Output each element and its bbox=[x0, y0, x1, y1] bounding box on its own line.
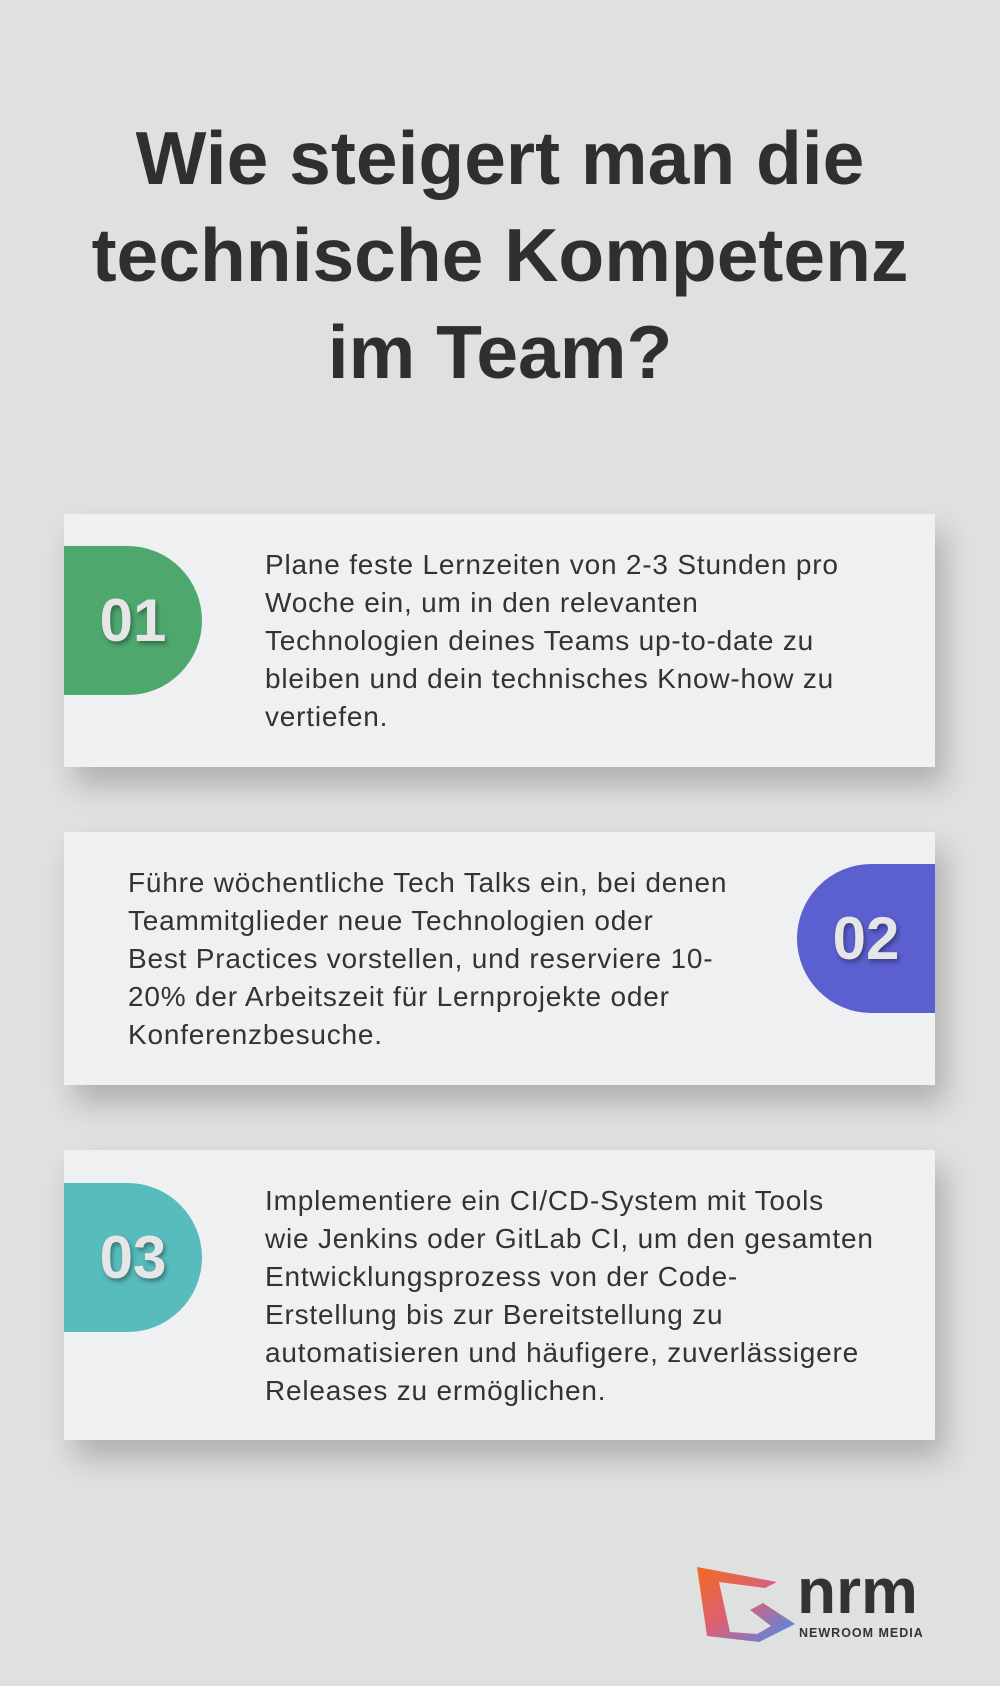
text 03 bbox=[265, 1185, 874, 1406]
text 03: automatisieren und häufigere, zuverlässigere bbox=[265, 1337, 859, 1368]
title: technische Kompetenz bbox=[92, 213, 908, 297]
text 02: Führe wöchentliche Tech Talks ein, bei denen bbox=[128, 867, 727, 898]
text 02: 20% der Arbeitszeit für Lernprojekte oder bbox=[128, 981, 670, 1012]
text 03: wie Jenkins oder GitLab CI, um den gesamten bbox=[265, 1223, 874, 1254]
badge 01 bbox=[64, 546, 202, 695]
text 02 bbox=[128, 867, 727, 1050]
icon: logo mark bbox=[697, 1567, 795, 1642]
text 01: bleiben und dein technisches Know-how zu bbox=[265, 663, 834, 694]
logo bbox=[697, 1555, 924, 1642]
text 01: vertiefen. bbox=[265, 701, 388, 732]
logo: NEWROOM MEDIA bbox=[799, 1626, 924, 1640]
text 01: Technologien deines Teams up-to-date zu bbox=[265, 625, 814, 656]
text 03: Entwicklungsprozess von der Code- bbox=[265, 1261, 738, 1292]
badge 03: 03 bbox=[100, 1224, 166, 1291]
badge 02: 02 bbox=[833, 905, 899, 972]
panel: step 03 bbox=[64, 1150, 935, 1440]
title: im Team? bbox=[328, 310, 672, 394]
text 01: Woche ein, um in den relevanten bbox=[265, 587, 699, 618]
text 01: Plane feste Lernzeiten von 2-3 Stunden pro bbox=[265, 549, 839, 580]
title bbox=[92, 116, 908, 394]
panel: step 01 bbox=[64, 514, 935, 767]
text 02: Best Practices vorstellen, und reserviere 10- bbox=[128, 943, 713, 974]
text 03: Implementiere ein CI/CD-System mit Tools bbox=[265, 1185, 824, 1216]
panel: step 02 bbox=[64, 832, 935, 1085]
badge 01: 01 bbox=[100, 587, 166, 654]
text 03: Releases zu ermöglichen. bbox=[265, 1375, 606, 1406]
text 02: Konferenzbesuche. bbox=[128, 1019, 383, 1050]
title: Wie steigert man die bbox=[136, 116, 864, 200]
badge 03 bbox=[64, 1183, 202, 1332]
text 03: Erstellung bis zur Bereitstellung zu bbox=[265, 1299, 723, 1330]
badge 02 bbox=[797, 864, 935, 1013]
logo text: nrm bbox=[797, 1555, 918, 1627]
text 01 bbox=[265, 549, 839, 732]
text 02: Teammitglieder neue Technologien oder bbox=[128, 905, 654, 936]
